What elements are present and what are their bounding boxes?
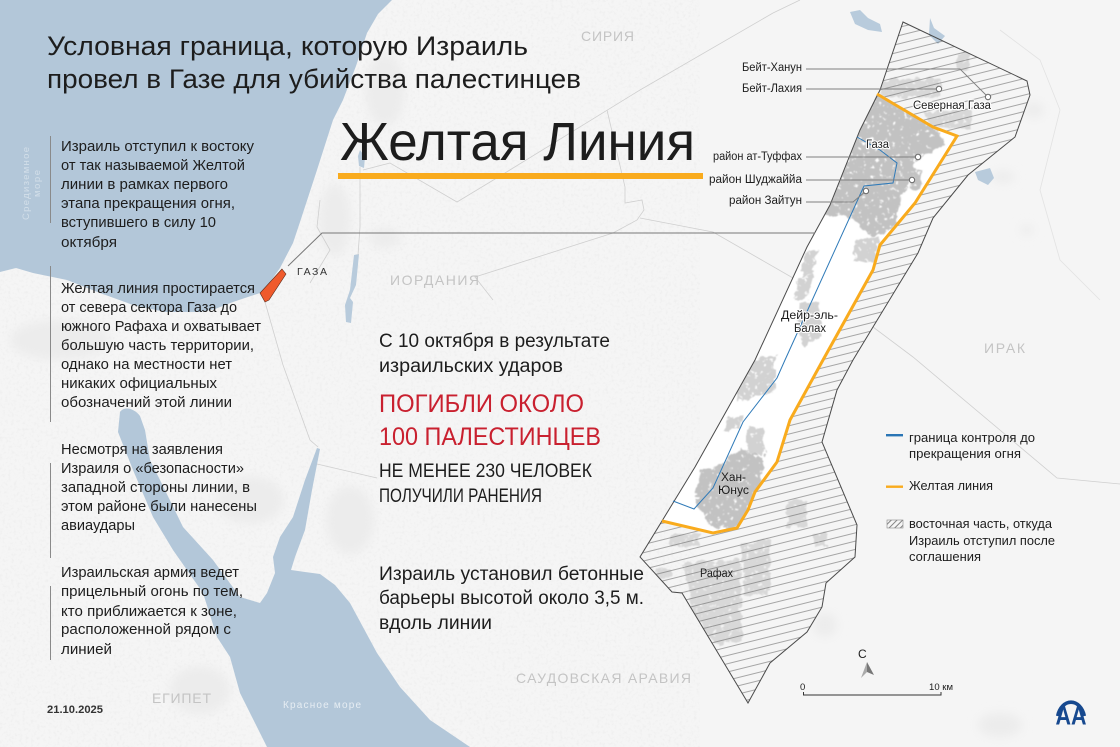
scale bar: 0 <box>800 682 805 693</box>
district labels: Северная Газа <box>913 100 992 112</box>
death toll: 100 ПАЛЕСТИНЦЕВ <box>379 423 601 451</box>
country and sea labels: Средиземное <box>21 147 32 220</box>
main heading: Желтая Линия <box>340 112 695 172</box>
Anadolu Agency logo: AA <box>1056 700 1087 730</box>
Yellow Line <box>662 94 957 533</box>
legend: hatched area: Израиль отступил после <box>909 534 1055 548</box>
injured: НЕ МЕНЕЕ 230 ЧЕЛОВЕК <box>379 461 592 482</box>
text block 2: однако на местности нет <box>61 356 232 373</box>
legend: yellow line: Желтая линия <box>909 479 993 493</box>
leader line from Gaza locator to detail map <box>288 233 815 266</box>
legend: hatched area: восточная часть, откуда <box>909 517 1052 531</box>
title <box>47 31 581 94</box>
legend: control line: граница контроля до <box>909 431 1035 445</box>
injured <box>379 461 592 507</box>
text block 1: этапа прекращения огня, <box>61 195 235 212</box>
district labels: Юнус <box>718 485 749 497</box>
text block 1: Израиль отступил к востоку <box>61 138 254 155</box>
text block 3: авиаудары <box>61 517 135 534</box>
country borders <box>265 0 1120 484</box>
district labels: Газа <box>866 139 890 151</box>
text block 3 <box>61 441 257 534</box>
country and sea labels: ЕГИПЕТ <box>152 690 212 706</box>
Mediterranean Sea <box>0 0 392 312</box>
barriers note <box>379 564 644 634</box>
country and sea labels: ГАЗА <box>297 266 327 278</box>
text block 2: большую часть территории, <box>61 337 254 354</box>
text block 3: этом районе были нанесены <box>61 498 257 515</box>
map of Gaza Strip <box>640 22 1030 703</box>
district labels: Хан- <box>721 472 746 484</box>
text block 1: октября <box>61 234 117 251</box>
text block 1: вступившего в силу 10 <box>61 214 216 231</box>
text block 4: Израильская армия ведет <box>61 564 239 581</box>
barriers note: барьеры высотой около 3,5 м. <box>379 588 644 609</box>
pre-ceasefire control line <box>673 137 897 509</box>
district labels: Рафах <box>700 568 733 580</box>
north arrow <box>858 647 874 678</box>
legend <box>886 431 1055 564</box>
legend: hatched area: соглашения <box>909 550 981 564</box>
legend: control line: прекращения огня <box>909 447 1021 461</box>
urban areas: east <box>655 53 973 645</box>
title: провел в Газе для убийства палестинцев <box>47 64 581 94</box>
text block 3: западной стороны линии, в <box>61 479 250 496</box>
district labels: Балах <box>794 323 826 335</box>
strip outline <box>640 22 1030 703</box>
country and sea labels: ИРАК <box>984 340 1026 356</box>
death toll <box>379 390 601 451</box>
country and sea labels: СИРИЯ <box>581 28 635 44</box>
text block 3: Израиля о «безопасности» <box>61 460 244 477</box>
legend: control line <box>886 431 1035 461</box>
text block 2: Желтая линия простирается <box>61 280 255 297</box>
text block 4 <box>61 564 243 658</box>
text block 2: никаких официальных <box>61 375 217 392</box>
district labels: район Зайтун <box>729 195 802 207</box>
district labels: Бейт-Ханун <box>742 62 802 74</box>
death toll: ПОГИБЛИ ОКОЛО <box>379 390 584 418</box>
text block 2: обозначений этой линии <box>61 394 232 411</box>
barriers note: вдоль линии <box>379 613 492 634</box>
text block 2 <box>61 280 261 411</box>
district labels: район Шуджаййа <box>709 174 803 186</box>
district labels <box>700 62 992 580</box>
barriers note: Израиль установил бетонные <box>379 564 644 585</box>
text block 4: кто приближается к зоне, <box>61 603 237 620</box>
district labels: Дейр-эль- <box>781 310 838 322</box>
text block 1 <box>61 138 254 251</box>
inland waters <box>345 10 994 323</box>
scale bar <box>800 682 953 695</box>
date: 21.10.2025 <box>47 704 103 716</box>
casualties intro: С 10 октября в результате <box>379 331 610 352</box>
left column dividers <box>50 136 52 660</box>
district labels: Бейт-Лахия <box>742 83 802 95</box>
heading underline <box>338 173 703 179</box>
hatched eastern area <box>640 22 1030 703</box>
scale bar: 10 км <box>929 682 953 693</box>
text block 2: южного Рафаха и охватывает <box>61 318 261 335</box>
Red Sea and gulfs <box>118 409 470 747</box>
title: Условная граница, которую Израиль <box>47 31 528 61</box>
text block 4: расположенной рядом с <box>61 621 231 638</box>
country and sea labels: Красное море <box>283 700 361 711</box>
area west of the Yellow Line <box>662 94 957 533</box>
district leader lines and markers <box>806 69 991 202</box>
district labels: район ат-Туффах <box>713 151 802 163</box>
legend: hatched area <box>887 517 1055 564</box>
casualties intro: израильских ударов <box>379 356 563 377</box>
casualties intro <box>379 331 610 377</box>
urban areas: west <box>695 85 945 530</box>
Gaza locator <box>260 269 286 302</box>
text block 4: линией <box>61 641 112 658</box>
land relief texture <box>0 0 700 747</box>
country and sea labels: ИОРДАНИЯ <box>390 272 480 288</box>
injured: ПОЛУЧИЛИ РАНЕНИЯ <box>379 486 542 507</box>
north arrow: С <box>858 647 867 661</box>
text block 3: Несмотря на заявления <box>61 441 223 458</box>
text block 4: прицельный огонь по тем, <box>61 583 243 600</box>
text block 1: линии в рамках первого <box>61 176 228 193</box>
country and sea labels: САУДОВСКАЯ АРАВИЯ <box>516 670 692 686</box>
country and sea labels: море <box>32 170 43 197</box>
text block 1: от так называемой Желтой <box>61 157 245 174</box>
text block 2: от севера сектора Газа до <box>61 299 237 316</box>
